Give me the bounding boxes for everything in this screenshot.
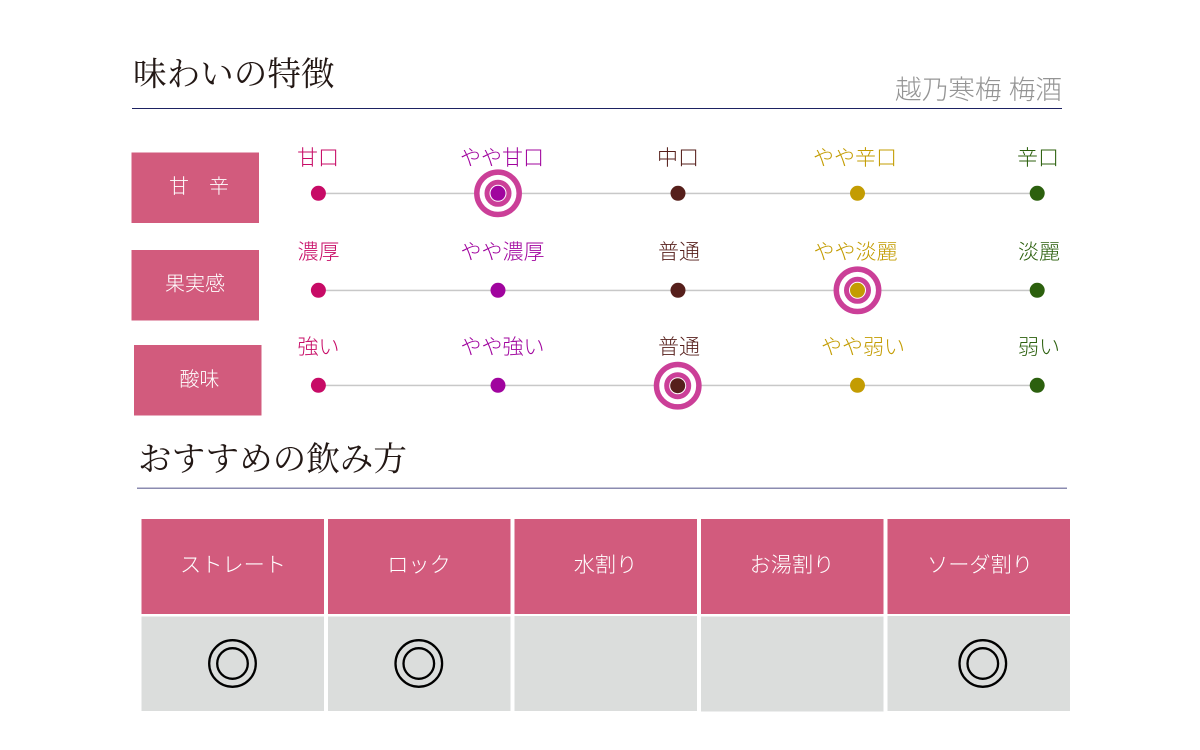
column: rock: ロック [387, 554, 451, 577]
row label: fruitiness: 果実感 [165, 272, 225, 296]
column: with water: 水割り [574, 553, 637, 577]
scale labels: acidity: 弱い [1018, 336, 1060, 359]
scale labels: acidity: 強い [298, 336, 340, 359]
column: with soda [888, 519, 1070, 711]
column: rock [328, 519, 510, 711]
scale labels: acidity: やや弱い [821, 336, 905, 359]
column: straight [142, 519, 324, 711]
scale labels: acidity: 普通 [658, 336, 700, 359]
scale labels: fruitiness: 濃厚 [298, 241, 340, 264]
row label: acidity [134, 345, 262, 416]
scale labels: fruitiness: やや淡麗 [814, 241, 898, 264]
row label: sweet-dry: 甘 辛 [169, 175, 229, 198]
column: with soda: ソーダ割り [927, 553, 1033, 577]
scale dots: fruitiness [311, 283, 1045, 298]
scale labels: sweet-dry [297, 147, 1059, 170]
marker: 普通 selected [656, 364, 699, 407]
scale dots: acidity [311, 378, 1045, 393]
scale labels: sweet-dry: 中口 [657, 147, 699, 170]
scale labels: sweet-dry: やや甘口 [460, 147, 544, 170]
panel: fruitiness row [132, 241, 1060, 320]
scale labels: fruitiness: 淡麗 [1018, 241, 1060, 264]
panel: serving table [142, 519, 1070, 712]
row label: fruitiness [132, 250, 259, 320]
icon: double circle [209, 640, 256, 687]
marker: やや淡麗 selected [836, 269, 879, 311]
scale labels: fruitiness: やや濃厚 [460, 241, 544, 264]
scale labels: sweet-dry: 辛口 [1017, 147, 1059, 170]
icon: double circle [396, 640, 442, 687]
row label: acidity: 酸味 [180, 368, 220, 391]
column: with hot water: お湯割り [750, 553, 834, 577]
scale labels: acidity: やや強い [460, 336, 544, 359]
marker: やや甘口 selected [477, 172, 519, 214]
heading: recommended serving: おすすめの飲み方 [138, 440, 407, 478]
scale labels: sweet-dry: 甘口 [297, 147, 339, 170]
title: taste characteristics: 味わいの特徴 [133, 56, 334, 94]
icon: double circle [960, 640, 1006, 687]
panel: sweet-dry row [132, 147, 1059, 223]
panel: acidity row [134, 336, 1060, 416]
scale labels: acidity [298, 336, 1060, 359]
row label: sweet-dry [132, 152, 259, 223]
column: straight: ストレート [180, 554, 286, 577]
column: with hot water [701, 519, 884, 712]
scale labels: fruitiness: 普通 [658, 241, 700, 264]
scale labels: sweet-dry: やや辛口 [813, 147, 897, 170]
product name: 越乃寒梅 梅酒 [895, 75, 1062, 105]
column: with water [514, 519, 697, 711]
scale dots: sweet-dry [311, 186, 1045, 201]
scale labels: fruitiness [298, 241, 1060, 264]
